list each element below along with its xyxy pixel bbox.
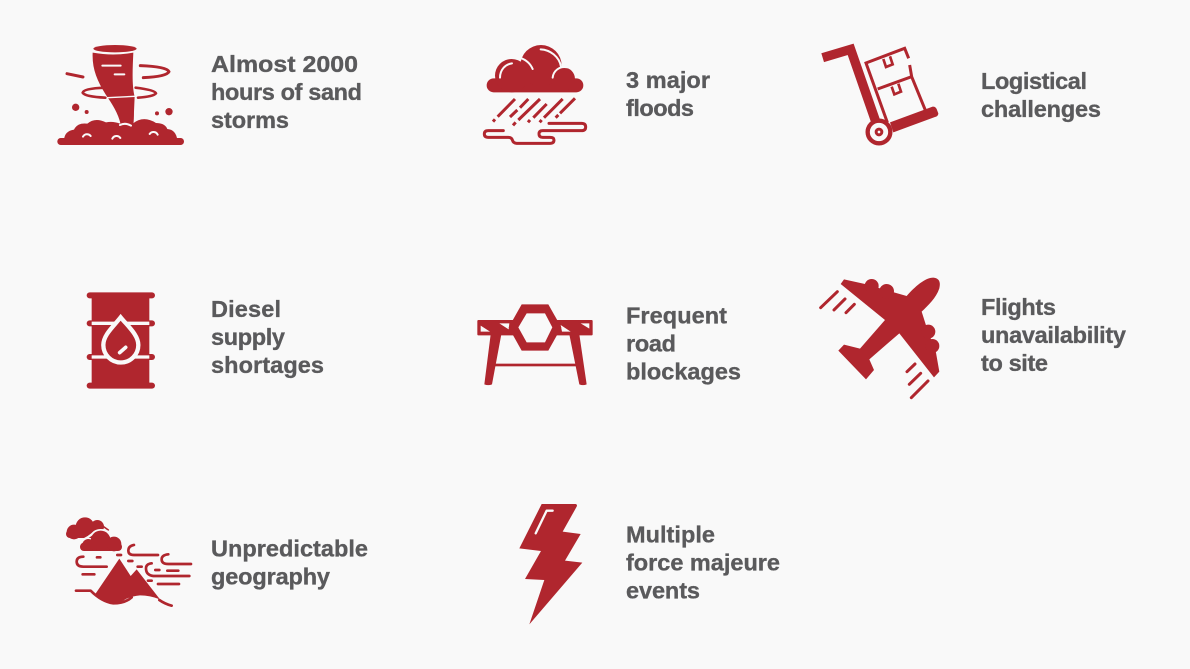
icon: airplane xyxy=(821,278,940,398)
text: sand storms: hours of sand xyxy=(211,79,362,105)
text: diesel shortages: shortages xyxy=(211,352,324,378)
icon: hand trolley with boxes xyxy=(823,48,938,143)
text: road blockages: blockages xyxy=(626,359,741,385)
text: force majeure: events xyxy=(626,578,700,604)
text: force majeure xyxy=(626,522,780,604)
text: logistical challenges xyxy=(981,68,1101,122)
text: floods: 3 major xyxy=(626,67,710,93)
text: diesel shortages xyxy=(211,296,324,378)
icon: lightning bolt xyxy=(519,504,582,624)
text: logistical challenges: Logistical xyxy=(981,68,1087,94)
text: floods: floods xyxy=(626,95,694,121)
text: flights unavailability: Flights xyxy=(981,294,1056,320)
icon: rain cloud and floods xyxy=(484,45,586,143)
text: diesel shortages: Diesel xyxy=(211,296,281,322)
text: unpredictable geography: Unpredictable xyxy=(211,536,368,562)
icon: road barrier xyxy=(477,304,593,385)
icon: tornado xyxy=(57,45,184,145)
text: road blockages: Frequent xyxy=(626,303,727,329)
icon: oil barrel xyxy=(87,292,155,389)
text: diesel shortages: supply xyxy=(211,324,285,350)
text: flights unavailability xyxy=(981,294,1126,376)
text: unpredictable geography xyxy=(211,536,368,590)
text: flights unavailability: to site xyxy=(981,350,1048,376)
text: sand storms: Almost 2000 xyxy=(211,51,358,77)
text: sand storms xyxy=(211,51,362,133)
icon: clouds, wind and mountains xyxy=(66,517,191,606)
text: sand storms: storms xyxy=(211,107,289,133)
text: force majeure: Multiple xyxy=(626,522,715,548)
text: floods xyxy=(626,67,710,121)
text: flights unavailability: unavailability xyxy=(981,322,1126,348)
text: road blockages xyxy=(626,303,741,385)
text: road blockages: road xyxy=(626,331,676,357)
text: force majeure: force majeure xyxy=(626,550,780,576)
text: unpredictable geography: geography xyxy=(211,564,330,590)
text: logistical challenges: challenges xyxy=(981,96,1101,122)
